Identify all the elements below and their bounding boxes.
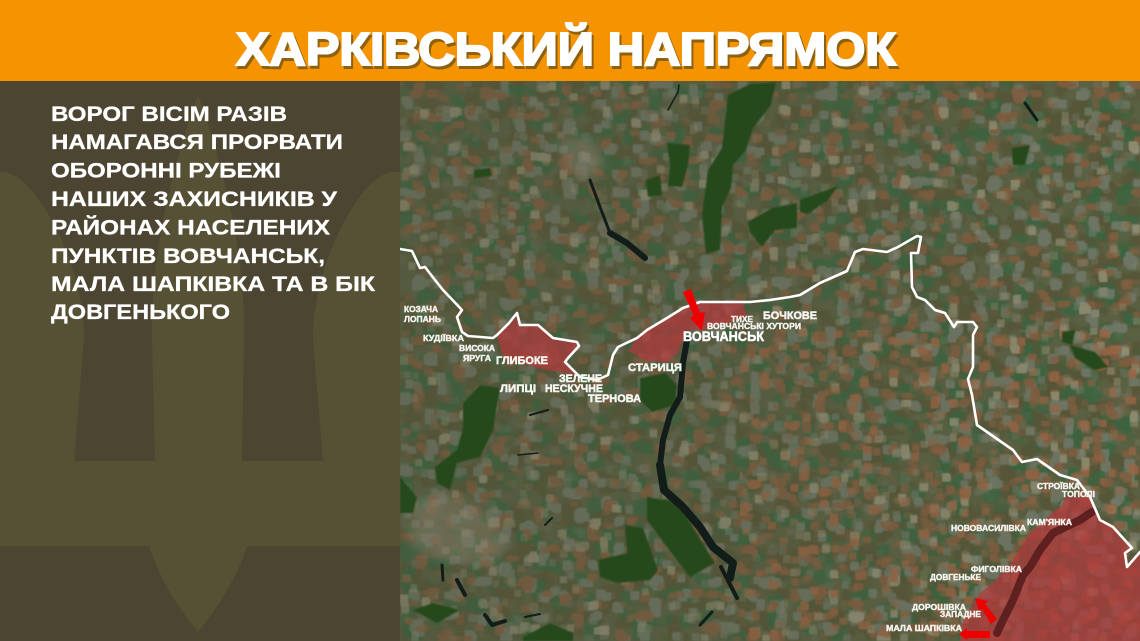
body text: ВОРОГ ВІСІМ РАЗІВ bbox=[51, 103, 287, 126]
settlement labels: ВОВЧАНСЬК bbox=[683, 329, 765, 344]
arrow: Dorohivka attack bbox=[975, 598, 997, 624]
front line bbox=[400, 236, 1140, 567]
settlement labels: ДОВГЕНЬКЕ bbox=[930, 573, 982, 582]
settlement labels: ЗАПАДНЕ bbox=[940, 610, 982, 619]
body text: НАМАГАВСЯ ПРОРВАТИ bbox=[51, 131, 343, 154]
body text bbox=[51, 103, 375, 324]
body text: НАШИХ ЗАХИСНИКІВ У bbox=[51, 188, 338, 211]
settlement labels: КОЗАЧА bbox=[404, 305, 438, 314]
settlement labels: ТОПОЛІ bbox=[1062, 490, 1095, 499]
body text: МАЛА ШАПКІВКА ТА В БІК bbox=[51, 273, 375, 296]
settlement labels: ВИСОКА bbox=[459, 344, 495, 353]
settlement labels: ЯРУГА bbox=[463, 354, 491, 363]
arrow: Mala Shapkivka attack bbox=[959, 628, 990, 640]
settlement labels: ЗЕЛЕНЕ bbox=[559, 373, 602, 385]
body text: РАЙОНАХ НАСЕЛЕНИХ bbox=[51, 216, 330, 240]
body text: ОБОРОННІ РУБЕЖІ bbox=[51, 160, 281, 182]
arrow: Vovchansk attack bbox=[683, 289, 705, 331]
settlement labels: КУДІЇВКА bbox=[423, 334, 464, 343]
occupied zone: Vovchansk bbox=[628, 302, 747, 362]
settlement labels: ДОРОШІВКА bbox=[912, 603, 966, 612]
settlement labels: МАЛА ШАПКІВКА bbox=[886, 624, 962, 633]
settlement labels: ЛИПЦІ bbox=[500, 383, 536, 395]
panel: left text panel bbox=[0, 81, 400, 641]
settlement labels: ФИГОЛІВКА bbox=[971, 565, 1022, 574]
satellite map bbox=[400, 81, 1140, 641]
forests bbox=[400, 82, 1108, 641]
title: ХАРКІВСЬКИЙ НАПРЯМОК bbox=[236, 23, 897, 75]
settlement labels: ГЛИБОКЕ bbox=[496, 355, 548, 367]
settlement labels: КАМ'ЯНКА bbox=[1027, 518, 1072, 527]
icon: trident watermark bbox=[0, 95, 400, 632]
settlement labels: ВОВЧАНСЬКІ ХУТОРИ bbox=[707, 322, 801, 331]
reservoirs and rivers bbox=[442, 85, 1037, 625]
body text: ПУНКТІВ ВОВЧАНСЬК, bbox=[51, 245, 325, 268]
occupied zone: south-east bbox=[960, 497, 1140, 641]
body text: ДОВГЕНЬКОГО bbox=[51, 301, 230, 324]
panel: header bar bbox=[0, 0, 1140, 81]
title: ХАРКІВСЬКИЙ НАПРЯМОК bbox=[238, 26, 899, 78]
settlement labels: БОЧКОВЕ bbox=[763, 310, 817, 322]
settlement labels: ТЕРНОВА bbox=[588, 393, 641, 405]
settlement labels bbox=[404, 305, 1095, 633]
urban area: city lower left bbox=[410, 135, 606, 565]
settlement labels: СТАРИЦЯ bbox=[628, 362, 682, 374]
settlement labels: ЛОПАНЬ bbox=[404, 315, 441, 324]
settlement labels: СТРОЇВКА bbox=[1037, 482, 1080, 491]
settlement labels: НОВОВАСИЛІВКА bbox=[951, 524, 1026, 533]
settlement labels: НЕСКУЧНЕ bbox=[545, 383, 603, 395]
settlement labels: ТИХЕ bbox=[731, 315, 754, 324]
occupied zone: Hlyboke bbox=[497, 313, 580, 377]
